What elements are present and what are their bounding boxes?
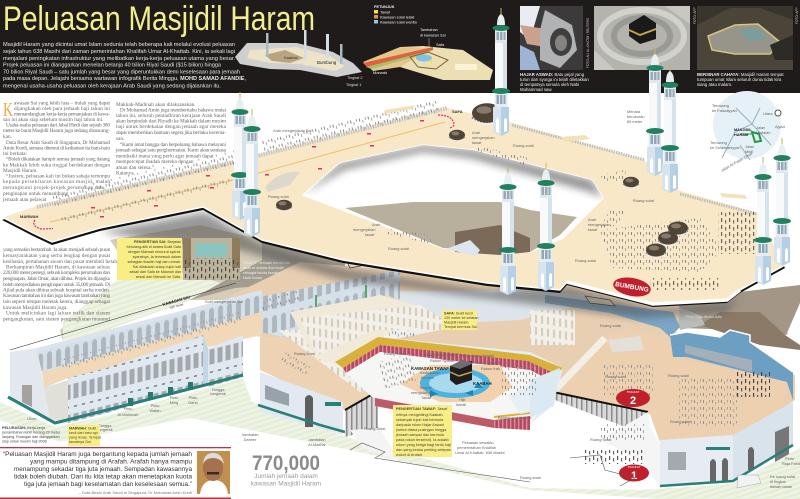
roof labels: mengerjakan	[472, 135, 494, 140]
photo captions: tumpuan umat Islam seluruh dunia tidak kira	[697, 77, 782, 82]
column text lower left: Untuk melicinkan lagi laluan trafik dan sistem	[6, 310, 111, 316]
photo captions	[520, 72, 784, 92]
callout: Pengertian Tawaf	[393, 405, 452, 457]
quote panel: menampung sekadar tiga juta jemaah. Sempadan kawasannya	[14, 466, 192, 473]
statistic: 770,000	[252, 452, 320, 475]
gallery labels: bergerak	[97, 427, 113, 432]
right gallery wall	[670, 330, 793, 400]
column text upper middle	[115, 102, 227, 176]
map inset: Jalan Al-Fatah Omar	[720, 150, 754, 173]
courtyard brown through opening	[345, 202, 577, 256]
map inset: Misfi	[745, 149, 753, 154]
portrait	[197, 451, 230, 494]
map inset: Utara	[763, 111, 773, 116]
map inset	[710, 91, 785, 173]
statistic	[251, 452, 321, 488]
central labels: Kedudukan	[420, 370, 440, 375]
central labels: Bangunan Uthmani	[498, 415, 531, 420]
roof shadow	[100, 212, 740, 318]
callout: Marwah	[68, 425, 101, 446]
photo: Hajar Aswad	[520, 6, 583, 70]
column text lower left: kemasyarakatan yang serba lengkap dengan pusat	[3, 253, 111, 259]
column text upper middle: membaiki mana yang perlu agar jemaah dapat	[116, 154, 214, 160]
central labels: Hijir	[459, 397, 466, 402]
intro text: Projek peluasan ini dianggarkan menelan belanja 40 bilion Riyal Saudi ($15 bilion) hingga	[3, 62, 222, 68]
roof labels: Arah	[588, 217, 596, 222]
callout: Pengertian Tawaf: wukuf di Arafah.	[396, 453, 423, 457]
gallery labels: Darbi	[188, 400, 198, 405]
ground path outlines	[350, 443, 635, 486]
roof labels: Ruang solat	[388, 246, 410, 251]
quote panel: – Duta Besar Arab Saudi di Singapura, Dr Mohamad Amin Kurdi	[79, 490, 192, 495]
column text lower left	[3, 247, 118, 322]
column text upper middle: haji untuk berdekatan dengan jemaah agar mereka	[116, 124, 227, 130]
central labels: mengulang	[411, 390, 430, 395]
photo captions: turun dari syurga ini telah diletakkan	[520, 77, 589, 82]
roof labels: Menara	[627, 109, 641, 114]
photo credits: FOTO: ALI AL-KHATIB / REUTERS	[586, 18, 590, 68]
photo credits: FOTO: AFP	[693, 7, 697, 24]
column text upper left: penginapan untuk menampung	[3, 191, 69, 197]
column text lower left: Kawasan tambahan ini dan juga kawasan tambahan yang	[3, 293, 110, 299]
roof labels	[20, 109, 655, 263]
central labels: Ruang solat	[384, 351, 406, 356]
central labels: pemerintahan Khalifah	[457, 445, 496, 450]
central labels: Umar Al-Khattab, 638 Masihi	[455, 450, 505, 455]
callout: Marwah: MARWAH: Bukit	[69, 426, 96, 430]
column text upper left: dijangkakan oleh para jemaah haji tahun ini	[14, 106, 111, 112]
roof labels: 89 meter	[627, 119, 643, 124]
central labels: Ruang solat	[670, 419, 692, 424]
column text lower left: kesihatan, pertahanan awam dan pusat membeli belah.	[3, 259, 118, 265]
PELURASAN note: penambahan lebih kurang 20 meter	[2, 430, 61, 434]
central labels: Rukun Syamu	[430, 358, 454, 363]
Tingkat 1 badge: TINGKAT	[628, 465, 641, 469]
callout: Pengertian Tawaf: (sebut disisa pusingan hingga	[396, 428, 447, 432]
map inset: ke Faisaliyyah	[712, 108, 737, 113]
mini plan: Sai extension: Safa	[436, 42, 445, 47]
gallery labels: Pintu	[151, 403, 159, 408]
central labels: Al-Mashar	[308, 442, 327, 447]
central labels: Ruang solat	[294, 351, 316, 356]
gallery labels: Jambatan	[241, 432, 259, 437]
gallery labels: Pintu	[189, 395, 197, 400]
photo captions: HAJAR ASWAD: Batu pejal yang	[520, 72, 585, 77]
photo: mosque at night	[697, 6, 793, 70]
column text upper left: memandangkan kerja-kerja pemanjakan di kawa-	[14, 112, 110, 118]
column text upper left: K	[3, 99, 13, 121]
central block and facade	[258, 295, 460, 462]
callout: Marwah: kecil dan batu api	[69, 431, 98, 435]
gallery labels: Daheer	[244, 437, 257, 442]
intro text: 70 bilion Riyal Saudi – satu jumlah yang besar yang diperuntukkan demi keselesaan para jemaah	[3, 70, 240, 76]
callout: Pengertian Tawaf: pada rukun tersebut). Ia adalah	[396, 438, 449, 442]
mini plan: roof level: Bumbung	[317, 60, 337, 65]
ring railing	[553, 338, 605, 392]
Kawasan Tawaf label: KAWASAN TAWAF	[411, 366, 449, 371]
caption on dark ground: GRAFIT: Jemaah berlari-lari	[243, 261, 290, 265]
lower level colonnade	[553, 392, 660, 487]
column text upper middle: “Kami amat bangga dan berpeluang bahawa melayani	[120, 141, 227, 148]
column text lower left: pengangkutan, satu sistem pengangkutan monorel	[3, 316, 111, 322]
roof labels: tawaf	[365, 232, 375, 237]
central labels: bawah tanah	[770, 484, 792, 489]
mini plan: roof level: Kaabah	[284, 55, 298, 60]
central labels: Ruang solat	[668, 373, 690, 378]
column text upper middle: tahun ini, seluruh pentadbiran kerajaan Arab Saudi	[116, 113, 227, 119]
map inset: Terowong	[712, 103, 729, 108]
central labels	[294, 314, 800, 489]
column text lower left: Ajlad pula akan dibina sebuah hospital serba moden.	[3, 288, 110, 294]
photo: Kaabah and crowd	[594, 6, 690, 70]
column text upper left: Amin Kurdi, semasa ditemui di kediaman ita baru-baru	[3, 146, 110, 152]
gallery labels: Wafah	[149, 408, 161, 413]
callout: Marwah: tamatnya Sai.	[69, 440, 92, 444]
roof labels: Ruang solat	[513, 143, 535, 148]
roof labels: Arah mengerjakan Sai	[273, 128, 312, 133]
central labels: Raja Fahd	[782, 461, 800, 466]
gallery labels: Ming	[170, 400, 178, 405]
callout: Pengertian Tawaf: jemaah sampai dan bermula	[395, 433, 445, 437]
photo captions: di tempatnya semula oleh Nabi	[520, 82, 579, 87]
Bumbung badge	[612, 275, 652, 299]
photo credits: FOTO: AFP	[795, 7, 799, 24]
mini plan: Sai extension: Tambahan	[420, 28, 438, 32]
map inset: Jalan	[756, 125, 765, 130]
quote panel: yang mampu ditampung di Arafah. Arafah hanya mampu	[30, 458, 192, 466]
header band	[0, 0, 800, 93]
central labels: Ruang solat	[605, 374, 627, 379]
roof labels: Ruang solat	[575, 258, 597, 263]
roof labels: berukuran	[627, 114, 645, 119]
column text lower left: Berhampiran Masjidil Haram, di kawasan seluas	[6, 264, 110, 270]
minarets	[231, 8, 791, 295]
mini plan: Sai extension: di kawasan Sai	[420, 34, 446, 38]
roof labels: mengerjakan	[588, 222, 610, 227]
central labels: di tingkat	[770, 479, 786, 484]
callout: Safa	[442, 310, 478, 330]
column text upper middle: aman dan selesa.”	[116, 165, 155, 171]
photo captions: siang atau malam.	[697, 82, 732, 87]
map inset: HARAM	[734, 133, 748, 137]
background brown top-right	[670, 285, 800, 350]
photo captions: Muhammad saw.	[520, 87, 552, 92]
callout: Safa: Masjidil Haram.	[444, 320, 469, 324]
central labels: Rukun Hajar Aswad	[424, 352, 458, 357]
quote panel	[0, 447, 231, 499]
central labels: Rukun Irak	[481, 366, 500, 371]
opening in roof	[303, 145, 603, 252]
statistic: Jumlah jemaah dalam	[254, 473, 318, 480]
Sai gallery dimension line	[10, 283, 236, 350]
central labels: Ruang solat	[520, 475, 542, 480]
roof parapet Sai	[34, 100, 757, 245]
column text upper left: “Boleh dikatakan hampir semua jemaah yang datang	[6, 156, 110, 162]
Mataf courtyard arcade	[335, 337, 563, 430]
gallery labels: Tangga	[99, 423, 112, 428]
callout: Pengertian Tawaf: PENGERTIAN TAWAF: Tawaf	[396, 407, 448, 411]
callout: Pengertian Sai: sekali dari Marwah ke Safa.	[136, 275, 181, 279]
blue wall under roof	[545, 295, 680, 337]
column text upper middle: Makkah-Madinah akan dilaksanakan.	[116, 102, 196, 108]
mini plan: Sai extension	[363, 28, 493, 80]
roof labels: SAFA	[452, 109, 463, 114]
caption on dark ground: anak di antara dua bukit	[243, 266, 284, 270]
column text upper left: jemaah atau pelawat	[2, 197, 47, 203]
callout: Safa: SAFA: Bukit kecil	[444, 312, 473, 316]
gallery labels	[27, 299, 259, 442]
column text upper left: kepada persekitaran kawasan masjid, malah	[3, 179, 110, 185]
mini plan: roof level: Tingkat 2	[347, 76, 362, 80]
photo captions: BERSINAR CAHAYA: Masjidil Haram tempat	[697, 72, 784, 77]
column text upper left: san ini akan siap sebelum musim haji tahun ini.	[3, 117, 103, 123]
central labels: Ibrahim	[421, 375, 434, 380]
title: Peluasan Masjidil Haram	[3, 0, 315, 38]
mini plan: roof level: Tingkat 1	[346, 83, 361, 87]
column text lower left: boleh menyediakan penginapan untuk 35,000 jemaah. Di	[3, 282, 111, 288]
map inset: Ajyad	[775, 124, 785, 129]
gallery labels: Ulum	[27, 416, 36, 421]
caption on dark ground: sebagai tanda kesabaran	[243, 271, 286, 275]
roof labels: MARWAH	[20, 214, 38, 219]
central labels: Ruang Solat	[590, 437, 612, 442]
column text lower left: penginapan, Jabal Omar, akan dibina. Projek ini dijangka	[3, 276, 111, 282]
map inset: Terowong	[710, 140, 727, 145]
map inset: Jalan	[745, 144, 754, 149]
quote panel: tidak boleh diubah. Dari itu kita tetap akan menetapkan kuota	[14, 474, 192, 480]
right facade	[660, 402, 793, 488]
column text upper middle: mempercepat ibadah mereka dengan	[116, 159, 194, 165]
PELURASAN note: Ianjang, Ruangan dan dianggarkan	[2, 435, 60, 439]
quote panel: “Peluasan Masjidil Haram juga bergantung kepada jumlah jemaah	[3, 451, 192, 458]
lower floor: far interior	[230, 262, 795, 442]
domes: Safa and prayer halls	[276, 103, 688, 258]
ground: tan area behind galleries	[60, 225, 345, 345]
central labels: Ruang Solat	[364, 426, 386, 431]
central labels: Ruang solat	[600, 323, 622, 328]
opening shadow	[303, 145, 603, 198]
gallery labels: bergerak	[210, 391, 226, 396]
column text lower left: kawasan Masjidil Haram juga.	[3, 305, 68, 311]
column text upper middle: san.	[116, 136, 124, 142]
column text upper middle: jemaah sebagai satu penghormatan. Kami akan sentiasa	[115, 148, 227, 154]
column text upper left: meter ke barat Masjidil Haram juga sedang dirancang-	[3, 128, 110, 134]
roof front rim	[567, 282, 740, 304]
roof labels: tawaf	[472, 140, 482, 145]
Kaabah label: KAABAH	[473, 381, 492, 386]
column text upper left: kan.	[3, 134, 12, 140]
callout: Pengertian Tawaf: daripada rukun Hajar Aswad	[396, 423, 444, 427]
legend: PETUNJUK	[374, 5, 395, 9]
gallery labels: Al-Mathrush	[118, 412, 138, 417]
legend: Kawasan solat lelaki	[380, 16, 415, 20]
central labels: Rukun Yamani	[474, 360, 499, 365]
column text upper left: ke Makkah lebih suka tinggal berdekatan dengan	[3, 162, 110, 168]
gallery: upper arches section	[228, 270, 440, 345]
gallery labels: Pintu	[124, 406, 132, 411]
Tingkat 2 badge: TINGKAT	[627, 390, 640, 394]
callout: Pengertian Tawaf: dan yang kedua penting selepas	[396, 448, 451, 452]
shaded ground behind roof	[190, 240, 345, 300]
PELURASAN note: siap untuk musim haji 2008	[2, 440, 47, 444]
column text lower left: 220,000 meter persegi, sebuah kompleks perumahan dan	[3, 270, 110, 276]
Sai gallery dimension line: KAWASAN SAI	[162, 294, 190, 307]
central labels: Ke ruang solat	[770, 474, 796, 479]
callout: Pengertian Sai: PENGERTIAN SAI: Berjalan	[134, 240, 181, 244]
upper level roof	[2, 107, 785, 304]
callout: Pengertian Sai: sekali dari Safa ke Marwah dan	[130, 270, 181, 274]
intro text: menjalani peningkatan infrastruktur yang melibatkan kerja-kerja peluasan utama yang besar.	[3, 56, 235, 62]
callout: Pengertian Sai	[117, 238, 182, 280]
column text upper middle: dapat memberikan bantuan segera jika berlaku kecema-	[116, 130, 226, 136]
column text upper left: Usaha-usaha peluasan dari Jabal Hindi dan sejauh 380	[6, 122, 110, 128]
callout: Pengertian Tawaf: rukun yang ketiga bagi fardu haji	[396, 443, 451, 447]
Tingkat 1 badge: 1	[631, 470, 637, 482]
column text upper left: awasan Sai yang lebih luas – itulah yang dapat	[14, 100, 111, 106]
Tingkat 1 badge	[619, 464, 649, 482]
legend	[374, 5, 418, 24]
intro text: Masjidil Haram yang dicintai umat Islam sedunia telah beberapa kali melalui evolusi peluasan	[3, 42, 235, 48]
column text upper middle: Dr Mohamad Amin juga memberitahu bahawa mulai	[120, 108, 227, 114]
column text upper left	[2, 99, 111, 203]
photo credits	[586, 7, 799, 68]
central labels: Jambatan	[308, 437, 326, 442]
central labels: Tempat	[419, 385, 433, 390]
callout: Safa: 130 meter ke selatan	[444, 316, 478, 320]
roof labels: tawaf	[588, 227, 598, 232]
map inset: MASJIDIL	[734, 128, 752, 132]
gallery labels: Tangga	[212, 387, 225, 392]
roof labels: Ruang solat	[268, 194, 290, 199]
gallery labels: Sutil mengerjakan Sai	[205, 299, 243, 304]
callout: Pengertian Sai: syaratnya. Ia termasuk dalam	[133, 255, 181, 259]
PELURASAN note: PELURASAN: Kerja-kerja	[2, 426, 46, 430]
column text upper left: merangkumi projek-projek perumahan dan	[3, 185, 103, 191]
map inset: ke Sulaimaniyyah	[710, 145, 740, 150]
column text lower left: yang semakin bertambah. Ia akan menjadi sebuah pusat	[3, 247, 111, 253]
Sai gallery	[8, 290, 262, 424]
intro text: pada masa depan. Jelajahi bersama wartawan infografik Berita Minggu, MOHD SAMAD AFANDIE,	[3, 76, 246, 82]
caption on dark ground	[243, 261, 290, 280]
central labels: Ismail	[456, 402, 466, 407]
central labels: Sa'ayo Hajar Aswad	[459, 353, 494, 358]
intro text: mengenai usaha-usaha peluasan oleh kerajaan Arab Saudi yang sedang dijalankan itu.	[3, 84, 221, 90]
Sai gallery dimension line: 395 meter	[169, 302, 185, 310]
column text upper left: ini berkata:	[3, 151, 28, 157]
column text upper left: “Justeru, peluasan kali ini bukan sahaja tertumpu	[6, 172, 110, 180]
right prayer floor	[553, 328, 787, 442]
roof crowd	[600, 212, 763, 290]
callout: Pengertian Sai: dengan Marwah menurut syarat-	[128, 250, 182, 254]
map inset: Misfalah	[756, 130, 770, 135]
roof labels: Arah	[472, 130, 480, 135]
column text upper middle: Katanya.	[116, 170, 135, 176]
roof labels: Arah	[372, 222, 380, 227]
Tingkat 2 badge	[616, 389, 650, 407]
column text lower left: lain seperti tempat meletak kereta, dianggap sebagai	[3, 299, 111, 305]
quote panel: tiga juta jemaah bagi keselamatan dan keselesaan semua.”	[24, 481, 192, 488]
callout: Pengertian Sai: berulang-alik di antara Bukit Safa	[127, 245, 182, 249]
callout: Pengertian Sai: sebagian ibadah haji dan umrah.	[127, 260, 181, 264]
photo: pilgrims at Sai	[183, 238, 240, 280]
roof labels: mengerjakan	[353, 227, 376, 232]
callout: Safa: Tempat bermula Sai.	[444, 325, 478, 329]
gallery labels: Pintu	[170, 395, 178, 400]
column text upper left: Duta Besar Arab Saudi di Singapura, Dr Mohamad	[6, 140, 110, 146]
roof terrace ramp	[345, 255, 615, 306]
Bumbung badge: BUMBUNG	[615, 281, 649, 294]
Tingkat 2 badge: 2	[630, 395, 636, 407]
legend: Kawasan solat wanita	[380, 20, 418, 24]
callout: Pengertian Sai: Sai dilakukan cukup tujuh kali	[133, 265, 181, 269]
intro text: sejak tahun 638 Masihi dari zaman pemerintahan Khalifah Umar Al-Khattab. Kini, ia sekali lagi	[3, 49, 235, 55]
callout: Pengertian Tawaf: ertinya mengelilingi Kaabah	[396, 413, 443, 417]
column text upper middle: akan berpindah dari Riyadh ke Makkah dalam musim	[116, 118, 227, 124]
roof labels: Ruang solat	[633, 198, 655, 203]
central labels: Pintu Raja Abdul Aziz	[685, 314, 722, 319]
upper level roof shadow edge	[2, 110, 785, 307]
mini plan: Sai extension: Marwah	[373, 70, 387, 75]
callout: Pengertian Tawaf: sebanyak tujuh kali bermula	[396, 418, 444, 422]
PELURASAN note	[2, 426, 61, 444]
ground: striped green area	[0, 262, 800, 499]
callout: Marwah: yang lenas. Tempat	[69, 436, 101, 440]
caption on dark ground: Nabi Ismail.	[243, 276, 263, 280]
central labels: Tawaf	[421, 395, 432, 400]
column text upper left: Masjidil Haram.	[3, 168, 38, 174]
intro text	[3, 42, 246, 90]
statistic: kawasan Masjidil Haram	[251, 480, 321, 488]
central labels: Pintu	[785, 456, 794, 461]
central labels: Peluasan sewaktu	[462, 440, 494, 445]
legend: Tawaf	[380, 10, 391, 14]
mini plan: roof level	[235, 30, 362, 87]
